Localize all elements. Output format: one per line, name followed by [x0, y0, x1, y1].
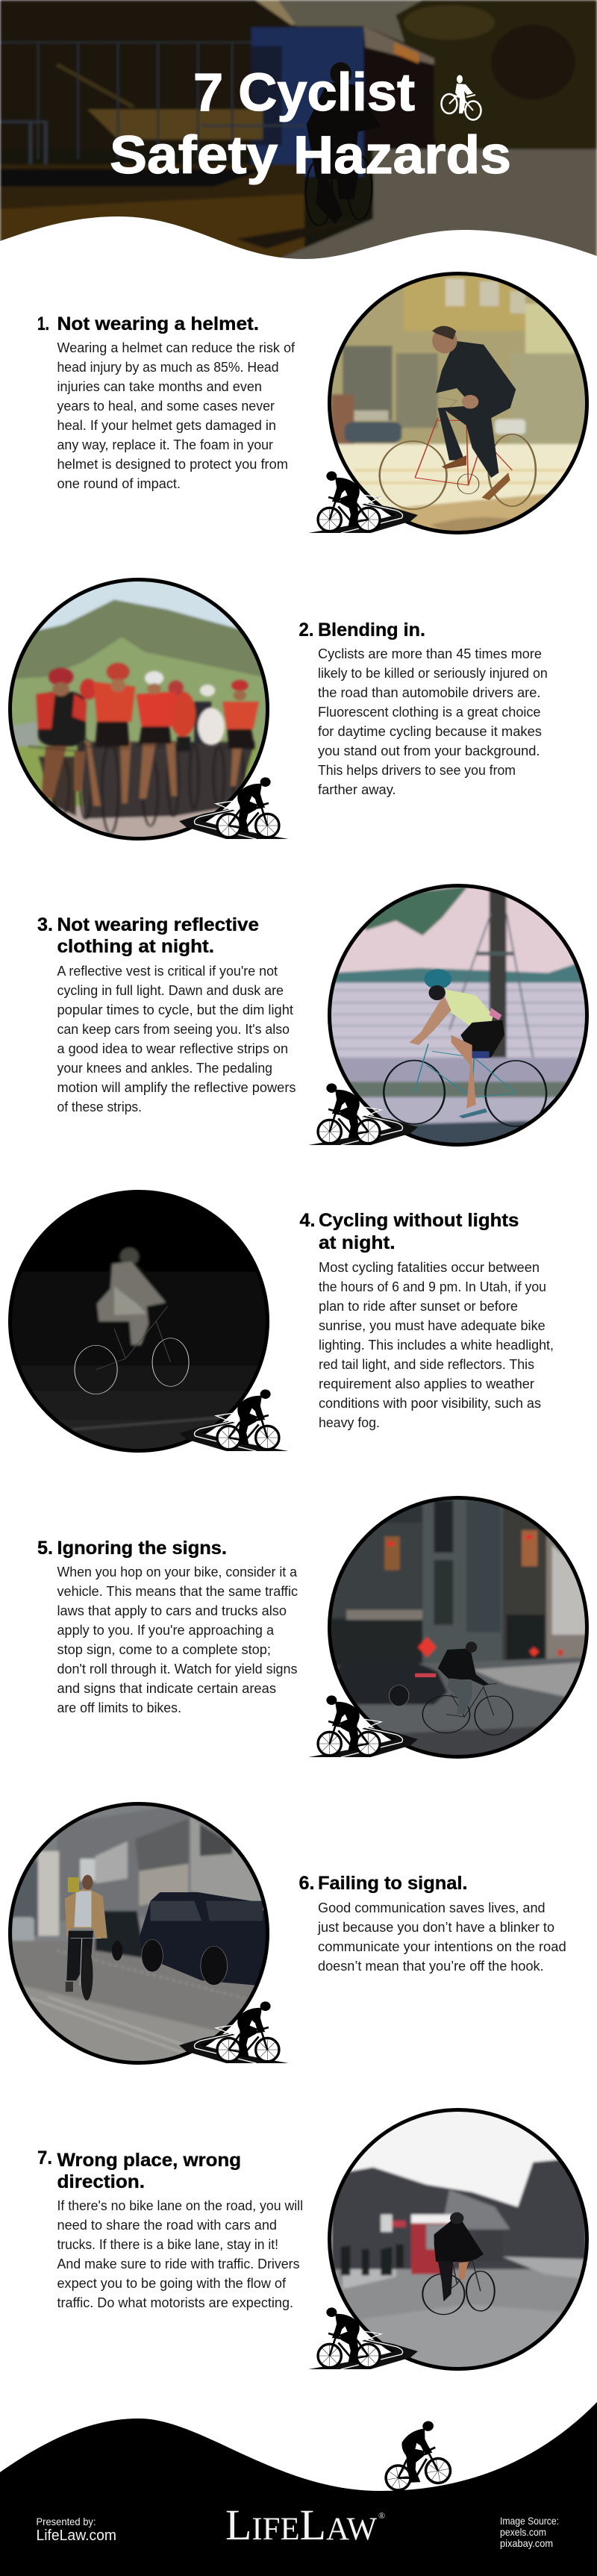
circle outline	[330, 2109, 587, 2369]
logo: LifeLaw: LIFELAW	[225, 2501, 377, 2549]
text: hazard 3 body: of these strips.	[57, 1100, 142, 1114]
heading: hazard 6: Failing to signal.	[318, 1873, 467, 1894]
credit: image source: Image Source:	[500, 2515, 559, 2527]
text: hazard 4 body: red tail light, and side reflectors. This	[319, 1357, 534, 1372]
text: hazard 1 body: injuries can take months and even	[57, 379, 262, 394]
panel: hazard 2	[0, 575, 548, 846]
text: hazard 5 body	[57, 1565, 298, 1715]
heading: hazard 6: 6.	[298, 1873, 315, 1894]
text: hazard 7 body: If there's no bike lane on the road, you will	[57, 2198, 303, 2213]
text: hazard 3 body: popular times to cycle, but the dim light	[57, 1002, 293, 1017]
text: hazard 2 body: the road than automobile drivers are.	[318, 685, 540, 700]
text: hazard 2 body: farther away.	[318, 782, 396, 797]
text: hazard 7 body: expect you to be going with the flow of	[57, 2276, 287, 2291]
heading: hazard 4: 4.	[300, 1210, 315, 1231]
text: hazard 5 body: apply to you. If you're approaching a	[57, 1623, 275, 1638]
heading: hazard 5: Ignoring the signs.	[57, 1538, 227, 1559]
photo: businessman on red bicycle	[331, 275, 585, 531]
heading: hazard 3: 3.	[37, 914, 53, 935]
text: hazard 2 body	[318, 646, 548, 797]
text: hazard 3 body: a good idea to wear reflective strips on	[57, 1041, 288, 1056]
cyclist in header photo	[306, 62, 381, 225]
text: hazard 1 body: Wearing a helmet can reduce the risk of	[57, 340, 296, 355]
icon: footer cyclist	[378, 2418, 452, 2492]
heading: hazard 7	[37, 2148, 241, 2192]
text: hazard 2 body: you stand out from your background.	[318, 743, 540, 758]
heading: hazard 3	[37, 914, 259, 957]
text: hazard 4 body	[319, 1260, 554, 1430]
icon: cyclist on winding road	[179, 777, 289, 839]
credit: image source	[500, 2515, 559, 2549]
panel: hazard 6	[0, 1799, 566, 2070]
icon: cyclist on winding road	[308, 2307, 418, 2369]
text: hazard 3 body	[57, 964, 296, 1114]
text: hazard 5 body: don't roll through it. Watch for yield signs	[57, 1662, 297, 1677]
text: hazard 6 body: communicate your intentions on the road	[318, 1939, 566, 1954]
text: hazard 6 body: just because you don’t have a blinker to	[317, 1920, 554, 1935]
credit: presented by: LifeLaw.com	[36, 2527, 116, 2544]
text: hazard 3 body: can keep cars from seeing you. It's also	[57, 1022, 290, 1037]
text: hazard 6 body: doesn’t mean that you’re off the hook.	[318, 1959, 544, 1974]
circle outline	[10, 1803, 267, 2063]
text: hazard 3 body: cycling in full light. Dawn and dusk are	[57, 983, 284, 998]
icon: cyclist on winding road	[308, 1695, 418, 1757]
text: hazard 3 body: your knees and ankles. The pedaling	[57, 1061, 272, 1076]
heading: hazard 7: 7.	[37, 2148, 52, 2168]
text: hazard 5 body: are off limits to bikes.	[57, 1700, 181, 1715]
footer hill	[0, 2402, 597, 2576]
text: hazard 7 body: trucks. If there is a bike lane, stay in it!	[57, 2237, 278, 2252]
heading: hazard 3: Not wearing reflective	[57, 914, 259, 935]
circle outline	[330, 885, 587, 1145]
title: 7 Cyclist	[193, 63, 415, 122]
photo: cyclist by the river	[331, 888, 585, 1143]
heading: hazard 4: at night.	[319, 1232, 396, 1253]
text: hazard 5 body: When you hop on your bike, consider it a	[57, 1565, 298, 1579]
text: hazard 4 body: the hours of 6 and 9 pm. In Utah, if you	[319, 1279, 546, 1294]
pack of legs and bikes	[76, 741, 255, 819]
text: hazard 6 body	[317, 1900, 566, 1974]
photo: road racing peloton	[12, 581, 266, 837]
heading: hazard 1: Not wearing a helmet.	[57, 314, 259, 334]
text: hazard 1 body: helmet is designed to protect you from	[57, 457, 288, 472]
panel: hazard 4	[0, 1187, 554, 1456]
heading: hazard 1: 1.	[37, 314, 49, 334]
icon: white cyclist	[442, 75, 481, 119]
title	[110, 63, 511, 185]
text: hazard 4 body: conditions with poor visibility, such as	[319, 1396, 541, 1411]
text: hazard 4 body: requirement also applies to weather	[319, 1376, 534, 1391]
icon: cyclist on winding road	[308, 1083, 418, 1145]
credit: image source: pexels.com	[500, 2526, 546, 2538]
text: hazard 3 body: motion will amplify the reflective powers	[57, 1080, 296, 1095]
credit: image source: pixabay.com	[500, 2537, 553, 2549]
photo: cyclist at night	[12, 1194, 266, 1449]
heading: hazard 3: clothing at night.	[57, 936, 214, 957]
text: hazard 4 body: sunrise, you must have adequate bike	[319, 1318, 546, 1333]
circle outline	[10, 1191, 267, 1451]
text: hazard 7 body: need to share the road with cars and	[57, 2218, 277, 2233]
text: hazard 7 body: And make sure to ride with traffic. Drivers	[57, 2257, 300, 2271]
text: hazard 4 body: lighting. This includes a white headlight,	[319, 1338, 554, 1353]
text: hazard 7 body	[57, 2198, 303, 2310]
logo: LifeLaw: ®	[378, 2510, 385, 2521]
heading: hazard 2: Blending in.	[318, 620, 425, 640]
text: hazard 3 body: A reflective vest is critical if you're not	[57, 964, 278, 979]
text: hazard 7 body: traffic. Do what motorists are expecting.	[57, 2295, 293, 2310]
heading: hazard 4: Cycling without lights	[319, 1210, 519, 1231]
heading: hazard 7: Wrong place, wrong	[57, 2150, 241, 2171]
text: hazard 6 body: Good communication saves lives, and	[318, 1900, 546, 1915]
text: hazard 5 body: laws that apply to cars and trucks also	[57, 1603, 287, 1618]
credit: presented by	[36, 2516, 116, 2544]
text: hazard 2 body: Cyclists are more than 45 times more	[318, 646, 542, 661]
circle outline	[330, 1497, 587, 1757]
panel: hazard 7	[37, 2105, 594, 2374]
heading: hazard 5: 5.	[37, 1538, 53, 1559]
header photo	[0, 0, 597, 274]
text: hazard 1 body: any way, replace it. The foam in your	[57, 437, 273, 452]
text: hazard 1 body: heal. If your helmet gets damaged in	[57, 418, 276, 433]
text: hazard 1 body	[57, 340, 296, 491]
photo: cyclist at city intersection	[331, 1500, 585, 1755]
text: hazard 2 body: likely to be killed or seriously injured on	[318, 666, 548, 681]
text: hazard 4 body: Most cycling fatalities occur between	[319, 1260, 540, 1275]
photo: cyclist beside parked cars	[12, 1806, 266, 2061]
text: hazard 1 body: one round of impact.	[57, 476, 181, 491]
text: hazard 2 body: for daytime cycling because it makes	[318, 724, 542, 739]
text: hazard 4 body: plan to ride after sunset or before	[319, 1299, 518, 1314]
text: hazard 5 body: vehicle. This means that the same traffic	[57, 1584, 298, 1599]
heading: hazard 4	[300, 1210, 519, 1253]
photo: cyclist crossing tram street	[331, 2112, 585, 2367]
text: hazard 2 body: Fluorescent clothing is a great choice	[318, 705, 540, 720]
circle outline	[10, 579, 267, 839]
text: hazard 5 body: stop sign, come to a complete stop;	[57, 1642, 271, 1657]
icon: cyclist on winding road	[308, 471, 418, 533]
circle outline	[330, 273, 587, 533]
credit: presented by: Presented by:	[36, 2516, 96, 2527]
title: Safety Hazards	[110, 126, 511, 185]
icon: cyclist on winding road	[179, 1389, 289, 1451]
heading: hazard 7: direction.	[57, 2171, 145, 2192]
footer	[0, 2402, 597, 2576]
text: hazard 5 body: and signs that indicate certain areas	[57, 1681, 276, 1696]
heading: hazard 2: 2.	[298, 620, 313, 640]
icon: cyclist on winding road	[179, 2001, 289, 2063]
text: hazard 1 body: head injury by as much as 85%. Head	[57, 360, 279, 375]
panel: hazard 1	[37, 269, 594, 540]
panel: hazard 5	[37, 1493, 594, 1764]
text: hazard 4 body: heavy fog.	[319, 1415, 380, 1430]
text: hazard 1 body: years to heal, and some cases never	[57, 399, 275, 414]
text: hazard 2 body: This helps drivers to see you from	[318, 763, 516, 778]
panel: hazard 3	[37, 881, 594, 1150]
